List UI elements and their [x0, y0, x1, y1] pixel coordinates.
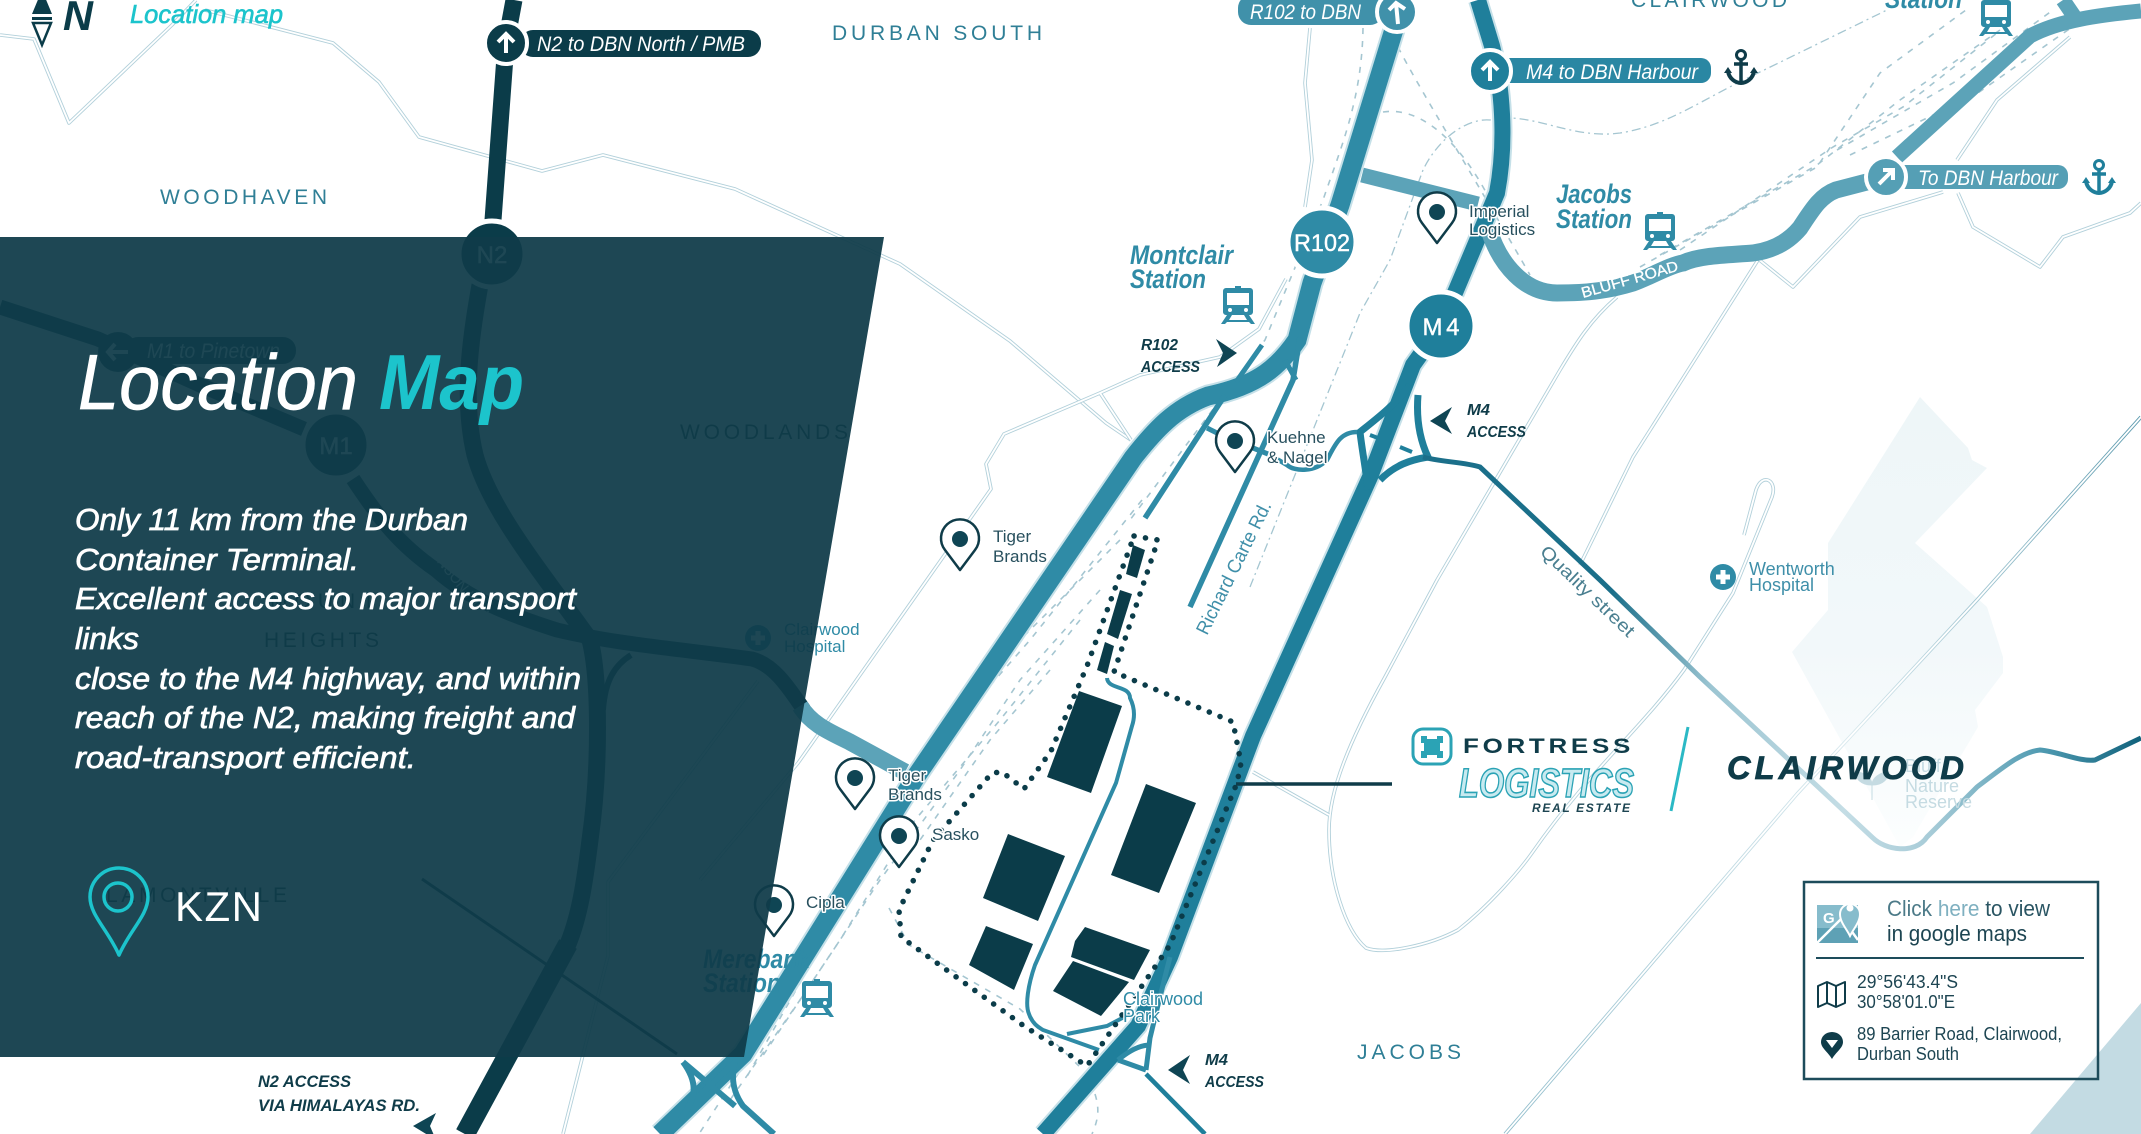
rail dashed lines	[699, 7, 2075, 1134]
shield: N2	[459, 221, 525, 287]
access: R102	[1140, 337, 1237, 376]
shield: N2: N2	[477, 242, 507, 269]
icon: folded map	[1818, 982, 1845, 1007]
text: address: Durban South	[1857, 1044, 1959, 1064]
text block: description: Excellent access to major transport	[75, 581, 577, 616]
area labels: WOODLANDS	[680, 421, 848, 444]
pin: Tiger Brands south	[836, 758, 874, 809]
label: Clairwood Park: Park	[1123, 1006, 1161, 1026]
access: M4 south: ACCESS	[1204, 1074, 1265, 1091]
icon: dark anchor	[1724, 50, 1758, 83]
logo: Fortress Logistics Real Estate	[1413, 729, 1634, 815]
pin: Cipla	[755, 885, 793, 936]
shield: M4: M4	[1422, 314, 1460, 341]
area labels: WOODHAVEN	[160, 186, 327, 209]
region: KZN	[90, 868, 262, 955]
sign: M1 to Pinetown: M1 to Pinetown	[147, 340, 280, 363]
company labels: & Nagel	[1267, 448, 1327, 467]
text block: description: road-transport efficient.	[75, 740, 416, 775]
access: N2 via Himalayas Rd: VIA HIMALAYAS RD.	[258, 1096, 420, 1115]
text: coordinates: 29°56'43.4"S	[1857, 972, 1958, 992]
text block: description: Only 11 km from the Durban	[75, 502, 468, 537]
region: KZN: KZN	[175, 883, 262, 930]
road: site internal road	[1027, 678, 1134, 1050]
access: M4 south: M4	[1205, 1052, 1228, 1069]
road: harbour spur and Bluff Road	[1362, 0, 2141, 293]
icon: Google Maps: G	[1823, 910, 1835, 927]
company labels	[806, 202, 1535, 912]
shield: M1	[303, 412, 369, 478]
panel: location map	[0, 237, 884, 1057]
company labels: Cipla	[806, 893, 845, 912]
label: Bluff Nature Reserve: Nature	[1905, 776, 1959, 796]
station: Merebank	[703, 944, 834, 1017]
text block: description: close to the M4 highway, and within	[75, 661, 581, 696]
sign: To DBN Harbour	[1866, 157, 2068, 197]
pin: Sasko	[880, 816, 918, 867]
sign: M4 to DBN Harbour	[1469, 50, 1711, 92]
sign: R102 to DBN	[1238, 0, 1417, 32]
icon and label: Wentworth Hospital: Hospital	[1749, 575, 1814, 595]
area labels: JACOBS	[1357, 1041, 1461, 1064]
heading: Location Map: Location	[78, 338, 358, 426]
icon and label: Wentworth Hospital	[1710, 559, 1835, 595]
icon: north compass	[32, 0, 95, 45]
access: R102: ACCESS	[1140, 359, 1201, 376]
sign: M1 to Pinetown	[98, 332, 296, 372]
road name: Higginson Highway: HIGGINSON HIGHWAY	[409, 522, 515, 651]
text: address	[1857, 1024, 2062, 1064]
road: link to R102	[800, 706, 905, 772]
station: Montclair: Station	[1130, 264, 1206, 294]
access: N2 via Himalayas Rd: N2 ACCESS	[258, 1072, 352, 1091]
shield: R102: R102	[1294, 230, 1350, 257]
shield: R102	[1288, 208, 1356, 276]
station: Jacobs: Station	[1556, 204, 1632, 234]
corner triangle	[2030, 1003, 2141, 1134]
text: address: 89 Barrier Road, Clairwood,	[1857, 1024, 2062, 1044]
icon and label: Wentworth Hospital: Wentworth	[1749, 559, 1835, 579]
icon: Google Maps	[1817, 904, 1860, 943]
site dotted boundary	[899, 536, 1241, 1066]
text: coordinates: 30°58'01.0"E	[1857, 992, 1955, 1012]
site buildings	[969, 545, 1196, 1016]
divider slash	[1671, 727, 1688, 811]
road: M1	[0, 307, 804, 1054]
label: Bluff Nature Reserve: Bluff	[1905, 756, 1942, 776]
station: Montclair: Montclair	[1130, 240, 1234, 270]
access: M4 north: ACCESS	[1466, 424, 1527, 441]
company labels: Logistics	[1469, 220, 1535, 239]
access: M4 north	[1430, 402, 1527, 441]
road: R102	[660, 10, 1400, 1134]
company labels: Tiger	[993, 527, 1031, 546]
label: Clairwood Park: Clairwood	[1123, 989, 1203, 1009]
text block: description: Container Terminal.	[75, 542, 359, 577]
station: Merebank: Merebank	[703, 944, 812, 974]
sign: N2 to DBN North: N2 to DBN North / PMB	[537, 33, 745, 56]
access: M4 south	[1168, 1052, 1265, 1091]
icon and label: Clairwood Hospital	[745, 620, 860, 656]
area labels: MOUNT	[270, 590, 375, 613]
heading: Location Map	[78, 338, 524, 426]
label: Bluff Nature Reserve	[1855, 756, 1972, 812]
logo: Clairwood: CLAIRWOOD	[1727, 750, 1968, 786]
text block: description: reach of the N2, making freight and	[75, 700, 577, 735]
company labels: Kuehne	[1267, 428, 1326, 447]
sign: To DBN Harbour: To DBN Harbour	[1918, 167, 2059, 190]
company labels: Imperial	[1469, 202, 1529, 221]
sign: N2 to DBN North	[485, 22, 761, 64]
shield: M4	[1407, 292, 1475, 360]
station: Montclair	[1130, 240, 1255, 324]
text: in google maps: in google maps	[1887, 921, 2027, 946]
access: R102: R102	[1141, 337, 1178, 354]
station: Jacobs: Jacobs	[1556, 179, 1632, 209]
icon and label: Clairwood Hospital: Clairwood	[784, 620, 860, 639]
area labels: DURBAN SOUTH	[832, 22, 1042, 45]
road: Quality Street	[1423, 457, 2141, 849]
label: Quality street: Quality street	[1536, 541, 1639, 641]
station: top right	[1885, 0, 2013, 36]
icon: address pin	[1821, 1032, 1843, 1059]
shield: M1: M1	[319, 433, 353, 460]
connector line from site to logo	[1236, 782, 1392, 786]
station: Merebank: Station	[703, 968, 781, 998]
pin: Kuehne and Nagel	[1216, 421, 1254, 472]
heading: Location Map: Map	[379, 338, 524, 426]
road: N2	[465, 0, 631, 1134]
label: Bluff Road: BLUFF ROAD	[1579, 258, 1680, 302]
pin: Tiger Brands north	[941, 519, 979, 570]
company labels: Sasko	[932, 825, 979, 844]
sign: M4 to DBN Harbour: M4 to DBN Harbour	[1526, 61, 1699, 84]
area labels: HEIGHTS	[264, 629, 379, 652]
logo: Fortress Logistics Real Estate: FORTRESS	[1463, 735, 1634, 758]
text: click here: Click here to view	[1887, 896, 2050, 921]
company labels: Brands	[993, 547, 1047, 566]
panel: Google Maps info box	[1804, 882, 2098, 1079]
company labels: Tiger	[888, 766, 926, 785]
nature reserve area	[1792, 397, 2003, 847]
logo: Fortress Logistics Real Estate: REAL ESTATE	[1532, 801, 1631, 815]
label: Bluff Nature Reserve: Reserve	[1905, 792, 1972, 812]
label: Clairwood Park	[1123, 989, 1203, 1026]
pin: Imperial Logistics	[1418, 192, 1456, 243]
area labels	[106, 0, 1787, 1064]
label: Richard Carte Rd: Richard Carte Rd.	[1193, 498, 1276, 638]
text block: description: links	[75, 621, 139, 656]
icon: teal anchor	[2082, 160, 2116, 193]
station: Jacobs	[1556, 179, 1677, 250]
area labels: LAMONTVILLE	[106, 884, 287, 907]
access: M4 north: M4	[1467, 402, 1490, 419]
sign: R102 to DBN: R102 to DBN	[1250, 1, 1362, 24]
access: N2 via Himalayas Rd	[258, 1072, 436, 1134]
road: M4	[1043, 0, 1502, 1134]
text: coordinates	[1857, 972, 1958, 1012]
text block: description	[75, 502, 581, 775]
icon and label: Clairwood Hospital: Hospital	[784, 637, 845, 656]
company labels: Brands	[888, 785, 942, 804]
logo: Fortress Logistics Real Estate: LOGISTICS	[1459, 760, 1634, 806]
